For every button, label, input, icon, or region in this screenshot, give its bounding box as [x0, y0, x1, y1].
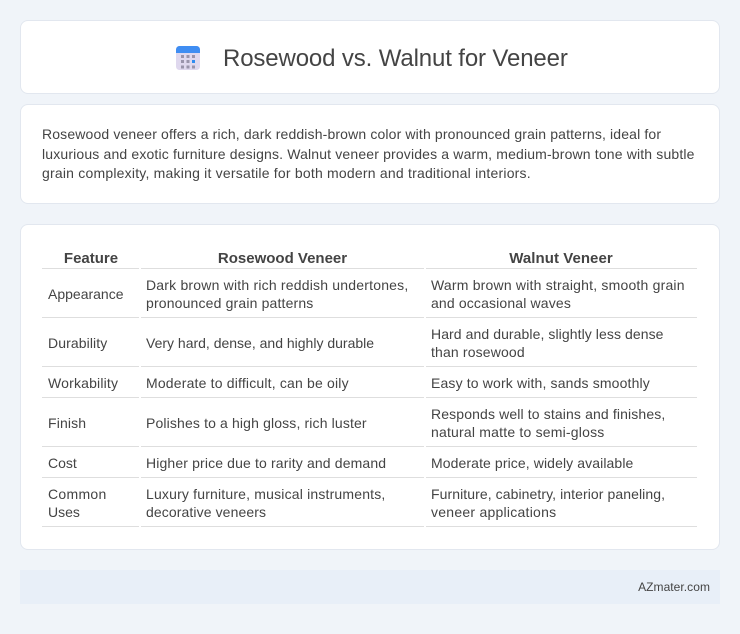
row: cost: [48, 455, 633, 471]
intro paragraph: Rosewood veneer offers a rich, dark reddish-brown color with pronounced grain patterns, ideal for: [42, 126, 661, 142]
row: common uses: veneer applications: [431, 504, 556, 520]
intro paragraph: [42, 126, 695, 181]
row: workability: Workability: [48, 375, 118, 391]
row: workability: Moderate to difficult, can be oily: [146, 375, 349, 391]
row: cost: Moderate price, widely available: [431, 455, 633, 471]
row: cost: Cost: [48, 455, 77, 471]
row: finish: [48, 406, 665, 440]
icon: calendar: [176, 46, 200, 70]
row: durability: Very hard, dense, and highly durable: [146, 335, 374, 351]
row: appearance: Dark brown with rich reddish undertones,: [146, 277, 408, 293]
row: durability: Durability: [48, 335, 107, 351]
table header: [64, 250, 613, 267]
row: workability: [48, 375, 650, 391]
row: cost: Higher price due to rarity and demand: [146, 455, 386, 471]
panel: title: [20, 20, 720, 94]
row: common uses: decorative veneers: [146, 504, 266, 520]
row: durability: Hard and durable, slightly less dense: [431, 326, 664, 342]
row: common uses: Luxury furniture, musical instruments,: [146, 486, 385, 502]
table header: Rosewood Veneer: [218, 250, 347, 267]
row: durability: [48, 326, 664, 360]
row: finish: natural matte to semi-gloss: [431, 424, 604, 440]
row: appearance: Warm brown with straight, smooth grain: [431, 277, 685, 293]
row: durability: than rosewood: [431, 344, 525, 360]
row: common uses: [48, 486, 665, 520]
panel: comparison table: [20, 224, 720, 550]
intro paragraph: luxurious and exotic furniture designs. Walnut veneer provides a warm, medium-brown tone with subtle: [42, 146, 695, 162]
row: finish: Responds well to stains and finishes,: [431, 406, 665, 422]
panel: intro text: [20, 104, 720, 204]
footer bar: [20, 570, 720, 604]
row: finish: Finish: [48, 415, 86, 431]
title: Rosewood vs. Walnut for Veneer: [223, 45, 568, 72]
footer source text: AZmater.com: [638, 580, 710, 594]
table header: Feature: [64, 250, 118, 267]
row: appearance: pronounced grain patterns: [146, 295, 313, 311]
intro paragraph: grain complexity, making it versatile for both modern and traditional interiors.: [42, 165, 531, 181]
row: appearance: and occasional waves: [431, 295, 571, 311]
row: common uses: Common: [48, 486, 107, 502]
row: common uses: Furniture, cabinetry, interior paneling,: [431, 486, 665, 502]
row: common uses: Uses: [48, 504, 80, 520]
row: workability: Easy to work with, sands smoothly: [431, 375, 650, 391]
row: appearance: [48, 277, 685, 311]
table header: Walnut Veneer: [509, 250, 613, 267]
row: finish: Polishes to a high gloss, rich luster: [146, 415, 367, 431]
row: appearance: Appearance: [48, 286, 124, 302]
